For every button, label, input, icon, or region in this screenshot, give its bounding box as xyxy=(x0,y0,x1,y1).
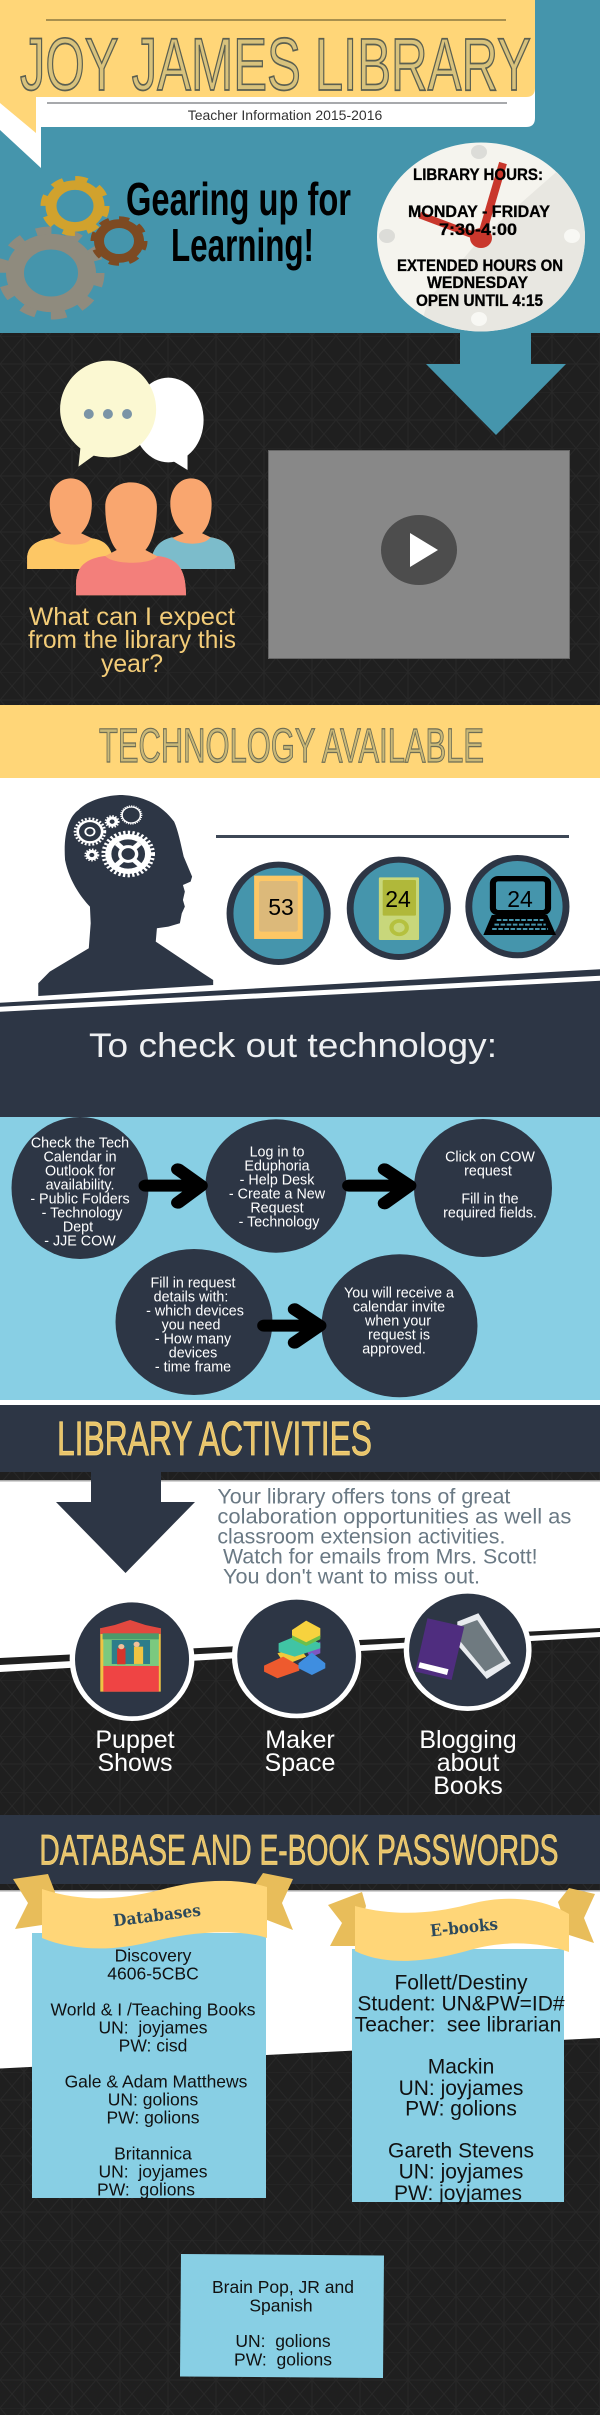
step circle 4: - which devices xyxy=(146,1303,244,1319)
step circle 4: devices xyxy=(169,1345,217,1361)
icon: tablet badge xyxy=(230,865,327,962)
library hours text: 7:30-4:00 xyxy=(439,220,517,239)
panel: library activities xyxy=(0,1405,600,1815)
step circle 1: - Technology xyxy=(42,1205,123,1221)
step circle 4: - How many xyxy=(155,1331,232,1347)
panel: header xyxy=(0,0,600,333)
step circle 5: calendar invite xyxy=(353,1299,445,1315)
card: e-books: UN: joyjames xyxy=(399,2077,523,2100)
icon: laptop badge: 24 xyxy=(507,886,533,912)
text: what can I expect xyxy=(28,603,236,678)
heading: to check out technology: To check out technology: xyxy=(89,1027,497,1065)
icon: laptop badge xyxy=(469,858,566,955)
library hours text xyxy=(397,165,563,310)
card: brain pop: Brain Pop, JR and xyxy=(212,2277,354,2297)
card: brain pop: PW: golions xyxy=(234,2349,332,2369)
step circle 4: Fill in request xyxy=(150,1275,236,1291)
panel: checkout steps xyxy=(0,1117,600,1405)
activity labels: Books xyxy=(433,1772,503,1800)
activity labels: about xyxy=(437,1749,499,1777)
step circle 1: Calendar in xyxy=(43,1149,117,1165)
library hours text: LIBRARY HOURS: xyxy=(413,165,543,184)
step circle 2 xyxy=(205,1119,347,1253)
library hours text: WEDNESDAY xyxy=(427,273,529,292)
card: databases: PW: cisd xyxy=(119,2036,187,2056)
card: databases: UN: joyjames xyxy=(99,2162,208,2182)
step circle 4: details with: xyxy=(154,1289,228,1305)
card: brain pop: UN: golions xyxy=(235,2331,331,2351)
step circle 5: request is xyxy=(368,1327,430,1343)
card: e-books: Teacher: see librarian xyxy=(355,2013,561,2036)
card: e-books: Mackin xyxy=(428,2056,494,2079)
subtitle: Teacher Information 2015-2016 xyxy=(188,107,382,123)
step circle 5: when your xyxy=(364,1313,431,1329)
card: e-books: Student: UN&PW=ID# xyxy=(357,1992,565,2016)
icon: people with speech bubbles xyxy=(27,361,235,595)
text: library intro xyxy=(217,1485,571,1588)
library hours text: EXTENDED HOURS ON xyxy=(397,256,563,275)
heading: gearing up xyxy=(126,173,351,271)
activity labels xyxy=(95,1726,517,1800)
step circle 4 xyxy=(116,1249,272,1395)
activity labels: Blogging xyxy=(419,1726,517,1754)
icon: gears xyxy=(2,179,145,316)
step circle 1: Outlook for xyxy=(45,1163,115,1179)
text: what can I expect: What can I expect xyxy=(29,603,235,631)
step circle 3: Click on COW xyxy=(445,1150,535,1166)
card: brain pop xyxy=(180,2254,384,2378)
card: e-books xyxy=(328,1888,595,2205)
step circle 1: - JJE COW xyxy=(44,1233,116,1249)
text: what can I expect: year? xyxy=(101,650,163,678)
activity labels: Space xyxy=(265,1749,335,1777)
card: databases: PW: golions xyxy=(106,2107,200,2127)
panel: technology white area xyxy=(0,778,600,1018)
heading: library activities: LIBRARY ACTIVITIES xyxy=(57,1413,372,1466)
heading: gearing up: Learning! xyxy=(171,219,314,271)
icon: media player badge: 24 xyxy=(385,886,411,912)
text: library intro: You don't want to miss out. xyxy=(223,1565,480,1588)
step circle 2: Request xyxy=(250,1201,304,1217)
icon: clock with library hours xyxy=(377,142,585,332)
card: brain pop: Spanish xyxy=(249,2296,313,2316)
step circle 3: Fill in the xyxy=(461,1192,519,1208)
icon: building blocks xyxy=(235,1597,359,1716)
step circle 5 xyxy=(322,1254,478,1397)
card: e-books: Follett/Destiny xyxy=(394,1971,528,1994)
divider band xyxy=(0,969,600,1007)
card: databases: UN: golions xyxy=(108,2089,198,2109)
step circle 3: request xyxy=(464,1164,512,1180)
card: databases: UN: joyjames xyxy=(99,2018,208,2038)
activity labels: Shows xyxy=(97,1749,173,1777)
card: e-books: PW: joyjames xyxy=(394,2182,522,2205)
step circle 3 xyxy=(414,1119,552,1257)
card: e-books: UN: joyjames xyxy=(399,2161,523,2184)
step circle 2: Log in to xyxy=(250,1145,304,1161)
arrow: header down to video xyxy=(426,333,566,435)
card: databases: Britannica xyxy=(114,2144,192,2164)
step circle 1: Check the Tech xyxy=(31,1135,129,1151)
card: databases: Gale & Adam Matthews xyxy=(65,2071,248,2091)
card: databases: World & I /Teaching Books xyxy=(51,2000,256,2020)
card: databases: 4606-5CBC xyxy=(107,1964,199,1984)
text: what can I expect: from the library this xyxy=(28,626,236,654)
icon: puppet theater xyxy=(72,1600,192,1719)
text: library intro: colaboration opportunities as well as xyxy=(217,1505,571,1528)
video placeholder xyxy=(268,450,570,658)
arrows between steps xyxy=(145,1169,409,1343)
step circle 4: - time frame xyxy=(155,1359,231,1375)
step circle 4: you need xyxy=(162,1317,220,1333)
icon: tablet badge: 53 xyxy=(268,894,294,920)
card: databases: PW: golions xyxy=(97,2180,195,2200)
step circle 2: - Technology xyxy=(239,1215,320,1231)
step circle 1: - Public Folders xyxy=(30,1191,130,1207)
library hours text: MONDAY - FRIDAY xyxy=(408,202,551,221)
banner label: databases: Databases xyxy=(112,1901,202,1930)
step circle 1: availability. xyxy=(46,1177,114,1193)
activity labels: Maker xyxy=(265,1726,335,1754)
heading: gearing up: Gearing up for xyxy=(126,173,351,225)
card: e-books: Gareth Stevens xyxy=(388,2140,534,2162)
text: library intro: classroom extension activities. xyxy=(217,1525,505,1548)
text: library intro: Watch for emails from Mrs. Scott! xyxy=(223,1545,538,1568)
rule xyxy=(216,835,569,838)
card: databases xyxy=(13,1873,293,2200)
step circle 2: Eduphoria xyxy=(244,1159,310,1175)
library hours text: OPEN UNTIL 4:15 xyxy=(416,291,543,310)
panel: passwords xyxy=(0,1815,600,2378)
card: databases: Discovery xyxy=(115,1946,192,1966)
icon: media player badge xyxy=(350,860,447,957)
activity labels: Puppet xyxy=(95,1726,175,1754)
step circle 5: You will receive a xyxy=(344,1285,454,1301)
step circle 3: required fields. xyxy=(443,1206,537,1222)
step circle 2: - Help Desk xyxy=(240,1173,315,1189)
step circle 2: - Create a New xyxy=(229,1187,326,1203)
step circle 5: approved. xyxy=(362,1341,426,1357)
step circle 1 xyxy=(12,1117,148,1259)
panel: technology heading band xyxy=(0,705,600,778)
icon: book and phone xyxy=(406,1591,529,1709)
panel: to check out technology xyxy=(0,981,600,1118)
text: library intro: Your library offers tons of great xyxy=(217,1485,511,1508)
card: e-books: PW: golions xyxy=(405,2098,517,2121)
icon: head silhouette with gears xyxy=(38,795,213,996)
step circle 1: Dept xyxy=(63,1219,93,1235)
banner label: e-books: E-books xyxy=(429,1915,499,1941)
arrow: down xyxy=(56,1470,195,1573)
